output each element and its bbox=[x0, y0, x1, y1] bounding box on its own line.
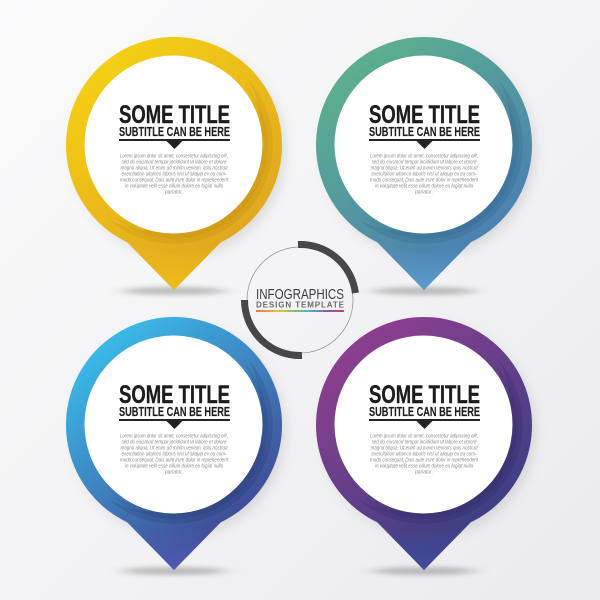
outer circle: yellow pin bbox=[66, 37, 282, 253]
body text: yellow pin: sed do eiusmod tempor incididunt ut labore et dolore bbox=[122, 160, 226, 166]
body text: cyan pin: Lorem ipsum dolor sit amet, consectetur adipiscing elit, bbox=[120, 434, 228, 440]
pointer tip colour: yellow pin bbox=[123, 238, 225, 290]
body text: green pin: sed do eiusmod tempor incididunt ut labore et dolore bbox=[372, 160, 476, 166]
soft drop shadow: cyan pin bbox=[73, 325, 285, 537]
subtitle: purple pin: SUBTITLE CAN BE HERE bbox=[369, 405, 480, 419]
body text: green pin: exercitation ullamco laboris nisi ut aliquip ex ea com- bbox=[372, 172, 477, 178]
body text: green pin: magna aliqua. Ut enim ad minim veniam, quis nostrud bbox=[370, 166, 478, 172]
body text: purple pin: magna aliqua. Ut enim ad minim veniam, quis nostrud bbox=[370, 446, 478, 452]
body text: cyan pin: exercitation ullamco laboris nisi ut aliquip ex ea com- bbox=[122, 452, 227, 458]
white disc: purple pin bbox=[334, 336, 512, 514]
thick arc: upper right bbox=[298, 244, 355, 293]
body text: purple pin bbox=[370, 434, 478, 476]
body text: green pin: pariatur. bbox=[414, 190, 433, 196]
body text: yellow pin: exercitation ullamco laboris nisi ut aliquip ex ea com- bbox=[122, 172, 227, 178]
subtitle: yellow pin: SUBTITLE CAN BE HERE bbox=[119, 125, 230, 139]
pointer tip colour: green pin bbox=[373, 238, 475, 290]
white disc: green pin bbox=[334, 56, 512, 234]
logo heading: INFOGRAPHICS bbox=[256, 286, 344, 303]
divider with marker: purple pin bbox=[369, 419, 480, 429]
divider with marker: cyan pin bbox=[119, 419, 230, 429]
pin: purple bbox=[316, 317, 535, 575]
logo subheading: DESIGN TEMPLATE bbox=[256, 300, 345, 310]
body text: yellow pin: Lorem ipsum dolor sit amet, consectetur adipiscing elit, bbox=[120, 154, 228, 160]
pointer: green pin bbox=[373, 238, 475, 290]
body text: purple pin: exercitation ullamco laboris nisi ut aliquip ex ea com- bbox=[372, 452, 477, 458]
body text: yellow pin: modo consequat. Duis aute irure dolor in reprehenderit bbox=[120, 178, 228, 184]
layered crescents: green pin bbox=[360, 81, 523, 244]
body text: cyan pin: pariatur. bbox=[164, 470, 183, 476]
rainbow bar bbox=[256, 310, 344, 312]
body text: purple pin: Lorem ipsum dolor sit amet, consectetur adipiscing elit, bbox=[370, 434, 478, 440]
center logo bbox=[244, 244, 355, 356]
outer circle: green pin bbox=[316, 37, 532, 253]
ground shadow: yellow pin bbox=[122, 287, 226, 295]
soft drop shadow: purple pin bbox=[323, 325, 535, 537]
pointer: yellow pin bbox=[123, 238, 225, 290]
subtitle: green pin: SUBTITLE CAN BE HERE bbox=[369, 125, 480, 139]
body text: green pin: modo consequat. Duis aute irure dolor in reprehenderit bbox=[370, 178, 478, 184]
outer circle: cyan pin bbox=[66, 317, 282, 533]
body text: cyan pin: modo consequat. Duis aute irure dolor in reprehenderit bbox=[120, 458, 228, 464]
body text: purple pin: sed do eiusmod tempor incididunt ut labore et dolore bbox=[372, 440, 476, 446]
pin: yellow bbox=[66, 37, 285, 295]
body text: purple pin: modo consequat. Duis aute irure dolor in reprehenderit bbox=[370, 458, 478, 464]
body text: yellow pin bbox=[120, 154, 228, 196]
white disc: cyan pin bbox=[84, 336, 262, 514]
divider with marker: green pin bbox=[369, 139, 480, 149]
body text: green pin: in voluptate velit esse cillum dolore eu fugiat nulla bbox=[375, 184, 473, 190]
thick arc: lower left bbox=[244, 300, 302, 356]
body text: cyan pin: sed do eiusmod tempor incididunt ut labore et dolore bbox=[122, 440, 226, 446]
body text: purple pin: pariatur. bbox=[414, 470, 433, 476]
pointer tip colour: purple pin bbox=[373, 518, 475, 570]
soft drop shadow: yellow pin bbox=[73, 45, 285, 257]
layered crescents: purple pin bbox=[360, 361, 523, 524]
thin ring bbox=[247, 247, 353, 353]
body text: green pin: Lorem ipsum dolor sit amet, consectetur adipiscing elit, bbox=[370, 154, 478, 160]
pointer: purple pin bbox=[373, 518, 475, 570]
ground shadow: green pin bbox=[372, 287, 476, 295]
body text: yellow pin: magna aliqua. Ut enim ad minim veniam, quis nostrud bbox=[120, 166, 228, 172]
title: yellow pin: SOME TITLE bbox=[119, 101, 230, 129]
outer circle: purple pin bbox=[316, 317, 532, 533]
pointer tip colour: cyan pin bbox=[123, 518, 225, 570]
pin: cyan-blue bbox=[66, 317, 285, 575]
body text: yellow pin: in voluptate velit esse cillum dolore eu fugiat nulla bbox=[125, 184, 223, 190]
white disc: yellow pin bbox=[84, 56, 262, 234]
title: green pin: SOME TITLE bbox=[369, 101, 480, 129]
divider with marker: yellow pin bbox=[119, 139, 230, 149]
body text: purple pin: in voluptate velit esse cillum dolore eu fugiat nulla bbox=[375, 464, 473, 470]
title: cyan pin: SOME TITLE bbox=[119, 381, 230, 409]
layered crescents: cyan pin bbox=[110, 361, 273, 524]
subtitle: cyan pin: SUBTITLE CAN BE HERE bbox=[119, 405, 230, 419]
title: purple pin: SOME TITLE bbox=[369, 381, 480, 409]
body text: yellow pin: pariatur. bbox=[164, 190, 183, 196]
body text: cyan pin: magna aliqua. Ut enim ad minim veniam, quis nostrud bbox=[120, 446, 228, 452]
ground shadow: cyan pin bbox=[122, 567, 226, 575]
ground shadow: purple pin bbox=[372, 567, 476, 575]
pointer: cyan pin bbox=[123, 518, 225, 570]
body text: cyan pin: in voluptate velit esse cillum dolore eu fugiat nulla bbox=[125, 464, 223, 470]
pin: green-blue bbox=[316, 37, 535, 295]
body text: cyan pin bbox=[120, 434, 228, 476]
body text: green pin bbox=[370, 154, 478, 196]
soft drop shadow: green pin bbox=[323, 45, 535, 257]
layered crescents: yellow pin bbox=[110, 81, 273, 244]
